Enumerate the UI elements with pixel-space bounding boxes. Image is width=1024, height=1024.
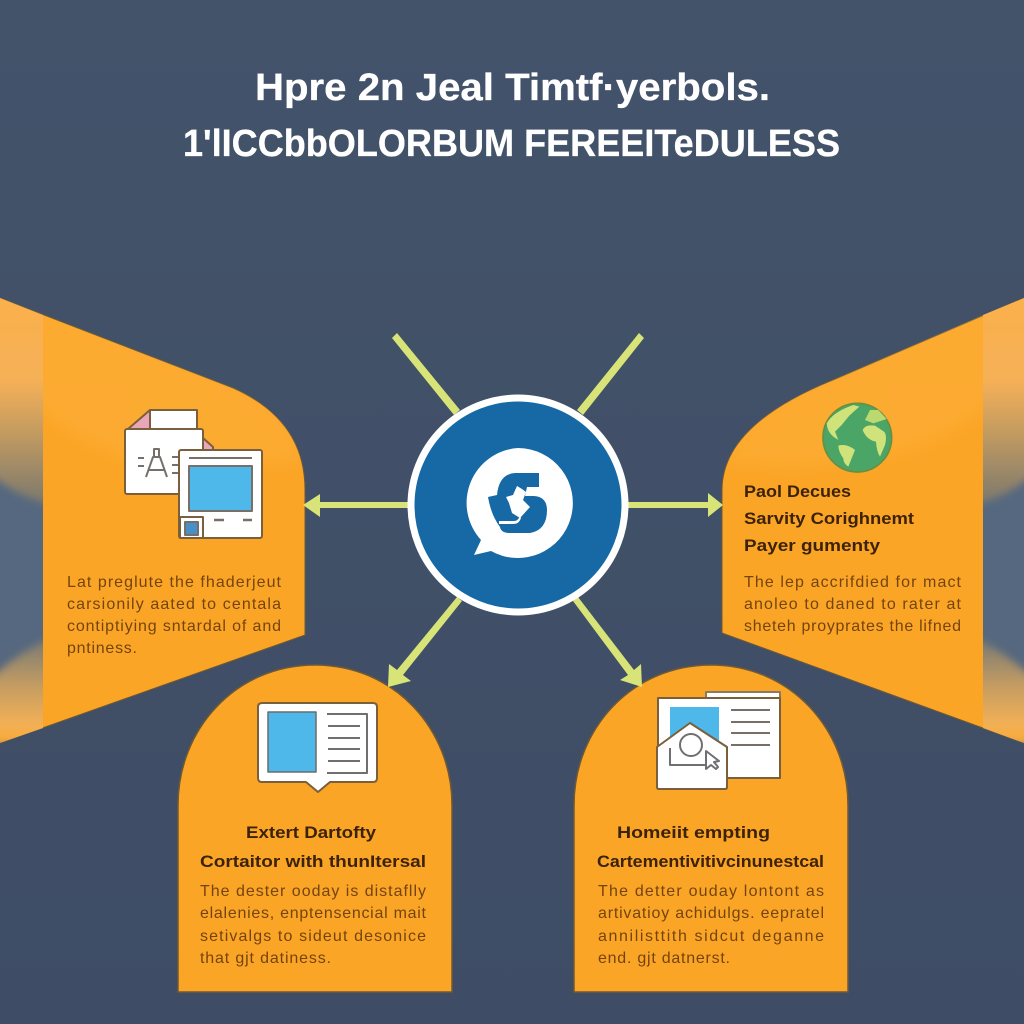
- panel: left: [0, 285, 305, 750]
- text: bottom right body: artivatioy achidulgs. eepratel: [598, 905, 824, 922]
- text: bottom left body: elalenies, enptensencial mait: [200, 905, 427, 922]
- text: left body: carsionily aated to centala: [67, 596, 281, 613]
- icon: book bubble: [258, 703, 377, 792]
- text: right body: sheteh proyprates the lifned: [744, 618, 961, 635]
- text: bottom left body: that gjt datiness.: [200, 950, 331, 967]
- title: 1'lICCbbOLORBUM FEREEITeDULESS: [183, 123, 840, 165]
- panel: right: [722, 285, 1024, 750]
- text: bottom left body: setivalgs to sideut desonice: [200, 928, 426, 945]
- text: right body: anoleo to daned to rater at: [744, 596, 962, 613]
- heading: bottom left: Extert Dartofty: [246, 823, 377, 842]
- connector arrows: [303, 333, 723, 687]
- central hub icon: [411, 398, 625, 612]
- text: left body: pntiness.: [67, 640, 137, 657]
- title: [183, 67, 840, 165]
- text: left body: contiptiying sntardal of and: [67, 618, 281, 635]
- panel: bottom right: [574, 665, 848, 992]
- text: bottom right body: end. gjt datnerst.: [598, 950, 730, 967]
- text: bottom right body: The detter ouday lontont as: [598, 883, 824, 900]
- icon: documents and window: [125, 410, 262, 538]
- text: left body: Lat preglute the fhaderjeut: [67, 574, 282, 591]
- icon: globe: [823, 403, 892, 472]
- heading: right panel: Paol Decues: [744, 482, 851, 501]
- panel: bottom left: [178, 665, 452, 992]
- heading: bottom left: [200, 823, 426, 871]
- text: bottom right body: annilisttith sidcut deganne: [598, 928, 824, 945]
- text: right body: The lep accrifdied for mact: [744, 574, 962, 591]
- title: Hpre 2n Jeal Timtf·yerbols.: [255, 67, 770, 109]
- heading: right panel: Sarvity Corighnemt: [744, 509, 914, 528]
- text: bottom right body: [598, 883, 824, 967]
- text: left body: [67, 574, 282, 657]
- heading: bottom right: [597, 823, 824, 871]
- heading: bottom right: Homeiit empting: [617, 823, 770, 842]
- heading: right panel: [744, 482, 914, 555]
- icon: sync swirl: [488, 473, 547, 533]
- icon: chat bubble: [467, 448, 573, 558]
- text: bottom left body: [200, 883, 427, 967]
- heading: bottom left: Cortaitor with thunItersal: [200, 852, 426, 871]
- icon: house and document: [657, 692, 780, 789]
- icon: swirl centre: [499, 486, 530, 524]
- text: bottom left body: The dester ooday is distaflly: [200, 883, 426, 900]
- heading: bottom right: Cartementivitivcinunestcal: [597, 852, 824, 871]
- text: right body: [744, 574, 962, 635]
- heading: right panel: Payer gumenty: [744, 536, 881, 555]
